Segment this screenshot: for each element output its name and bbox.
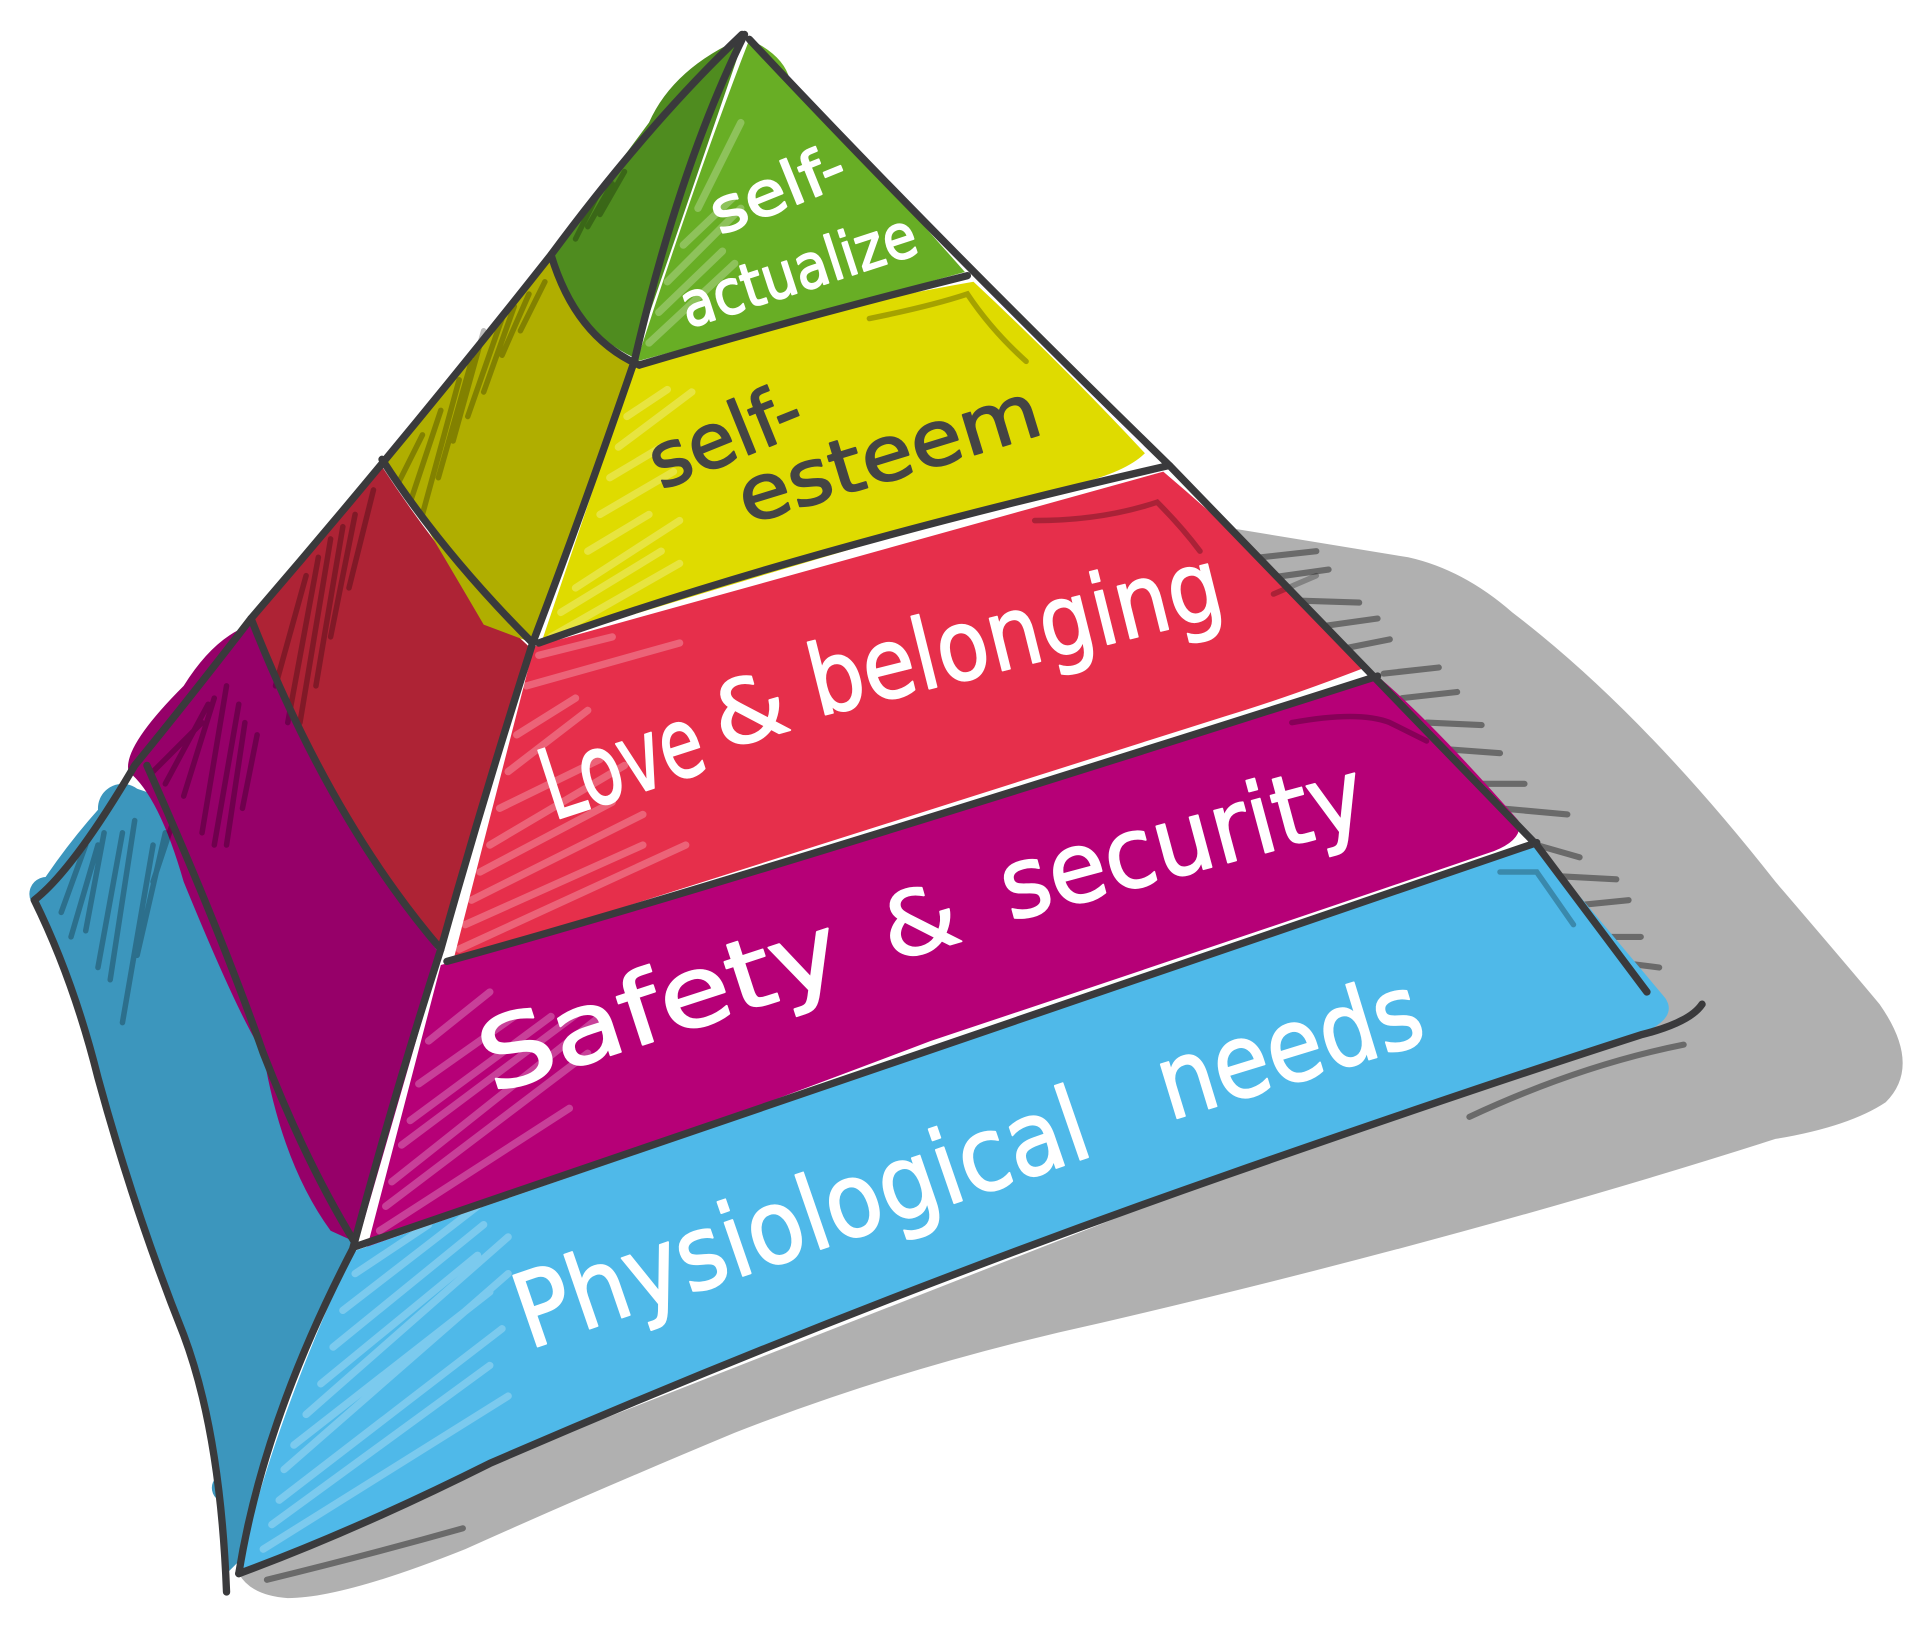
blobs: blue overflow (29, 784, 241, 1503)
label: safety and security: security (987, 737, 1377, 944)
shading strokes on left faces (61, 172, 1573, 1023)
band: self-esteem (541, 282, 1145, 643)
label: love and belonging: Love (526, 684, 718, 843)
label: safety and security: & (869, 862, 970, 982)
band: self-actualize (637, 39, 965, 361)
face: olive (386, 257, 631, 643)
label: self-esteem: esteem (726, 366, 1051, 541)
label: safety and security (464, 737, 1377, 1116)
face: dark red (251, 463, 529, 945)
label: love and belonging (526, 527, 1234, 843)
panel: front faces (239, 39, 1669, 1574)
label: love and belonging: & (700, 650, 799, 770)
face: dark blue (34, 784, 355, 1574)
label: self-actualize: self- (699, 131, 856, 249)
label: self-esteem: self- (635, 365, 816, 507)
band: safety and security (367, 676, 1519, 1247)
panel: left faces (29, 37, 744, 1574)
label: physiological needs: needs (1142, 951, 1437, 1144)
face: dark green (551, 37, 744, 358)
label: physiological needs (498, 951, 1437, 1373)
hatching on front faces (263, 123, 741, 1549)
ground shadow (239, 529, 1903, 1598)
label: physiological needs: Physiological (498, 1065, 1104, 1373)
label: safety and security: Safety (464, 893, 855, 1116)
band: love and belonging (453, 472, 1365, 961)
label: self-actualize: actualize (671, 199, 926, 343)
label: self-esteem (635, 365, 1051, 541)
shadow hatching (267, 551, 1684, 1580)
label: self-actualize (671, 131, 926, 343)
face: dark magenta (128, 625, 441, 1243)
label: love and belonging: belonging (796, 527, 1234, 740)
band: physiological needs (239, 845, 1669, 1574)
white underlay (34, 34, 1647, 1574)
